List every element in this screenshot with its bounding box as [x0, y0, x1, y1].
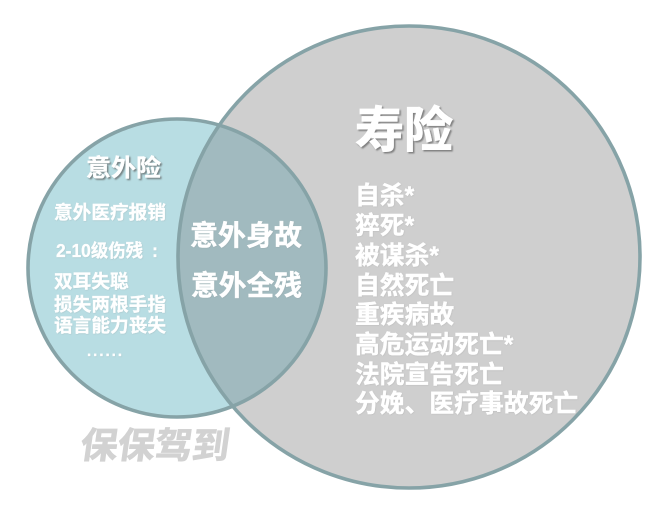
overlap labels: 意外身故	[190, 220, 302, 251]
accident insurance coverage list: 语言能力丧失	[54, 315, 166, 336]
accident insurance coverage list	[54, 202, 166, 360]
accident insurance coverage list: 2-10级伤残	[56, 240, 143, 261]
watermark logo: 保保驾到	[78, 425, 233, 466]
overlap labels: 意外全残	[191, 270, 302, 301]
life insurance coverage list	[355, 182, 578, 418]
accident insurance coverage list: 双耳失聪	[54, 271, 129, 292]
life insurance coverage list: 高危运动死亡*	[355, 331, 514, 359]
life insurance coverage list: 自然死亡	[355, 272, 454, 300]
life insurance coverage list: 自杀*	[355, 182, 415, 210]
accident insurance coverage list: :	[152, 241, 158, 261]
heading: accident insurance: 意外险	[86, 154, 161, 182]
overlap labels	[190, 220, 302, 301]
life insurance coverage list: 分娩、医疗事故死亡	[355, 390, 578, 418]
accident insurance coverage list: ......	[87, 343, 122, 360]
accident insurance coverage list: 意外医疗报销	[54, 202, 166, 223]
circle outline: accident insurance	[28, 119, 326, 417]
circle outline: life insurance	[178, 26, 640, 488]
accident insurance coverage list: 损失两根手指	[54, 294, 166, 315]
heading: life insurance: 寿险	[355, 104, 453, 158]
life insurance coverage list: 猝死*	[355, 212, 415, 240]
life insurance coverage list: 重疾病故	[355, 301, 454, 329]
overlap region	[180, 127, 324, 404]
life insurance coverage list: 法院宣告死亡	[355, 361, 504, 389]
circle: life insurance	[178, 26, 640, 488]
circle: accident insurance	[28, 119, 326, 417]
life insurance coverage list: 被谋杀*	[355, 242, 439, 270]
